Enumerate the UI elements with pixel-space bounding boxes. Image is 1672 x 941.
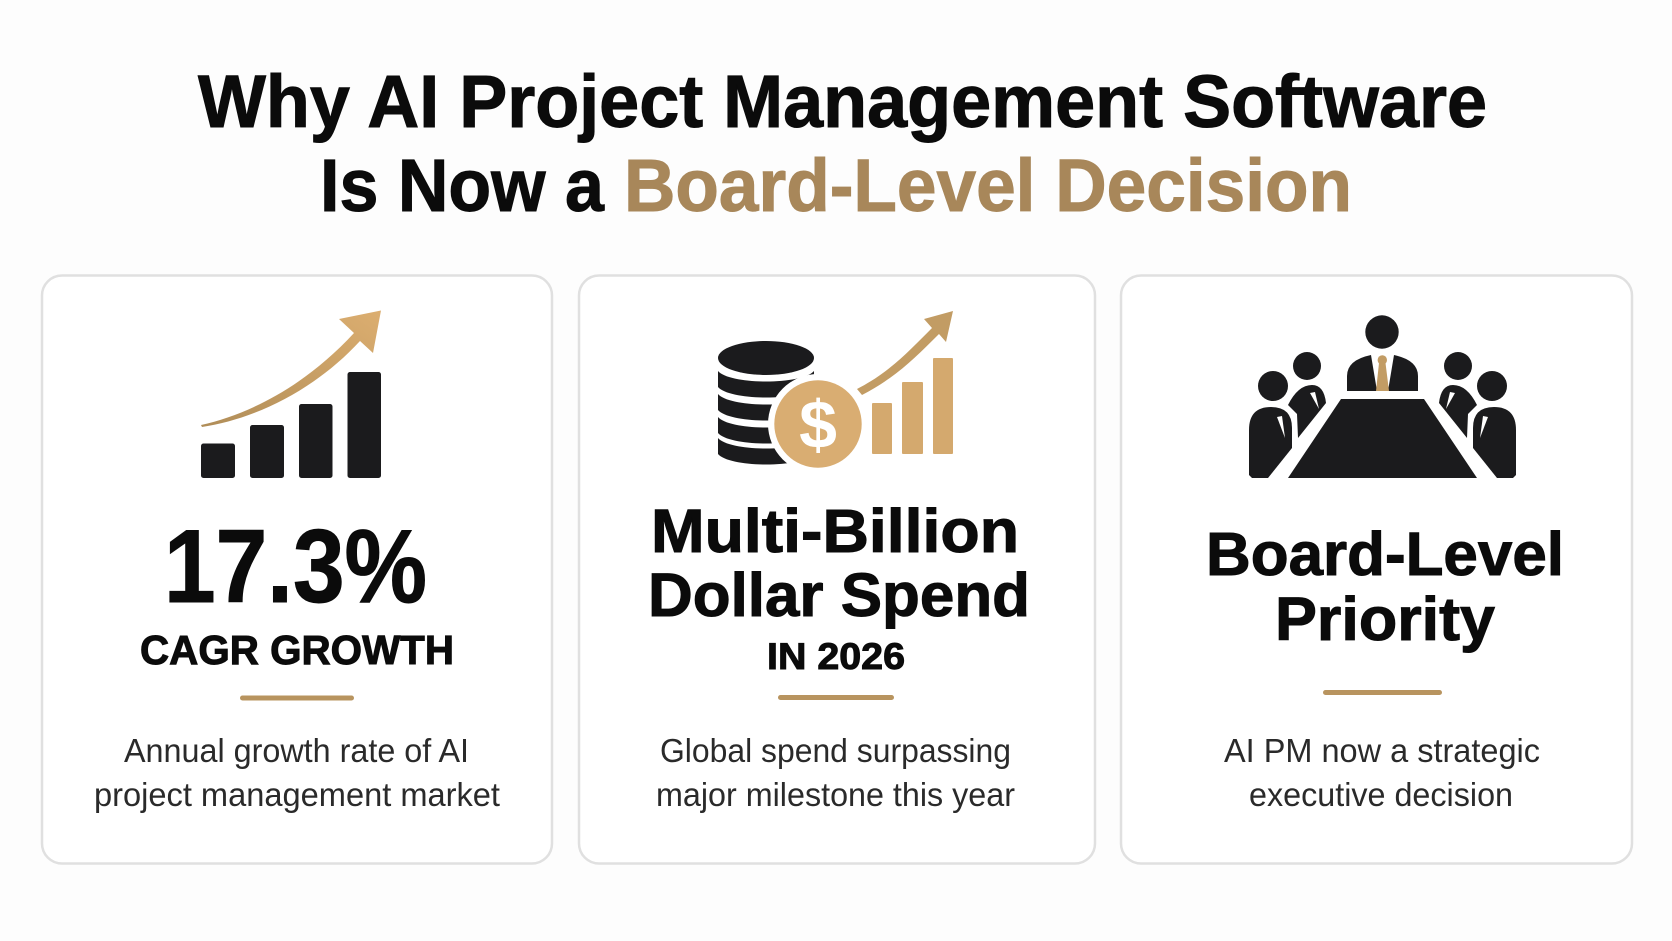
panel: multi-billion dollar spend	[579, 276, 1095, 864]
description: Annual growth rate of AI	[124, 732, 469, 769]
divider	[240, 696, 354, 700]
description: executive decision	[1249, 776, 1513, 813]
icon: coin stack, dollar coin and gold bars: $	[799, 387, 837, 463]
icon: rising bar chart with arrow	[201, 310, 381, 478]
divider	[778, 695, 894, 700]
title: Why AI Project Management Software	[198, 60, 1487, 143]
heading	[648, 497, 1030, 629]
heading: Multi-Billion	[651, 497, 1019, 565]
divider	[1323, 690, 1442, 695]
title: Is Now a	[320, 144, 605, 227]
panel: board-level priority	[1121, 276, 1632, 864]
description: AI PM now a strategic	[1224, 732, 1540, 769]
description	[94, 732, 500, 813]
title	[198, 60, 1487, 227]
big stat: 17.3%: 17.3%	[164, 509, 427, 625]
description	[1224, 732, 1540, 813]
title: Board-Level Decision	[624, 144, 1352, 227]
icon: coin stack, dollar coin and gold bars	[718, 311, 953, 474]
description	[656, 732, 1015, 813]
heading: Dollar Spend	[648, 561, 1030, 629]
heading: Priority	[1275, 585, 1495, 653]
description: project management market	[94, 776, 500, 813]
description: major milestone this year	[656, 776, 1015, 813]
heading: Board-Level	[1206, 520, 1564, 588]
stat label: CAGR GROWTH	[140, 627, 454, 673]
panel: CAGR growth	[42, 276, 552, 864]
subheading: IN 2026	[767, 636, 905, 677]
description: Global spend surpassing	[660, 732, 1011, 769]
heading	[1206, 520, 1564, 653]
icon: boardroom table with executives	[1249, 315, 1516, 478]
